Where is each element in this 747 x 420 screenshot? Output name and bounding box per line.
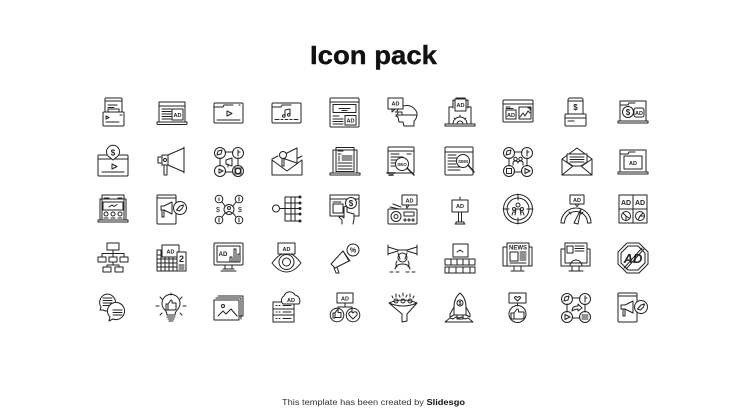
icon: organisation chart <box>98 243 128 272</box>
icon: calendar ad: AD <box>167 250 174 256</box>
icon: video player <box>214 103 243 123</box>
icon: light bulb with thumb <box>156 293 186 321</box>
icon: megaphone <box>158 147 184 175</box>
icon: social media network with megaphone <box>214 148 244 176</box>
icon: social network with people <box>504 148 532 176</box>
icon: ad with thumb and heart: AD <box>341 296 349 302</box>
icon: seo browser with magnifier <box>387 147 414 175</box>
icon: browser with hand and dollar <box>330 195 359 224</box>
icon: laptop with article <box>330 148 360 175</box>
icon: phone with megaphone and twitter <box>157 195 186 224</box>
icon: server with ad cloud <box>273 292 300 322</box>
icon: laptop with ad <box>157 102 187 124</box>
icon: laptop with dollar and ad: $ <box>626 108 631 117</box>
icon: branching node tree <box>272 196 302 222</box>
icon: browser with ad and chart: AD <box>507 113 515 119</box>
icon: monitor with ad chart <box>214 243 243 271</box>
icon: sem browser with magnifier <box>445 147 474 175</box>
icon: money network people: $ <box>216 207 220 214</box>
icon: no ads octagon: AD <box>623 251 643 266</box>
icon: calendar ad <box>157 245 186 271</box>
title: Icon pack <box>310 40 438 70</box>
icon: radio with ad <box>388 195 417 224</box>
icon: eye with ad: AD <box>283 247 290 253</box>
icon: phone and ad card <box>103 98 124 126</box>
icon: four ad panels: AD <box>621 200 631 207</box>
icon: laptop dashboard <box>98 195 128 222</box>
icon: calendar ad: 2 <box>179 254 184 264</box>
icon: laptop with ad screen: AD <box>629 161 637 167</box>
icon: head with ad bubble: AD <box>392 102 399 108</box>
icon: phone with dollar and card: $ <box>573 103 578 112</box>
icon: gauge with ad: AD <box>573 198 581 204</box>
icon: browser with ad: AD <box>347 118 354 124</box>
icon: browser with hand and dollar: $ <box>349 199 354 208</box>
icon: megaphone with percent <box>331 244 359 273</box>
icon: open envelope <box>562 148 592 175</box>
icon: heart and thumb badge <box>509 293 526 322</box>
icon: keyboard with monitor <box>445 244 475 273</box>
icon: funnel with dollars <box>389 293 417 322</box>
icon: image stack <box>214 296 243 320</box>
icon: ad with thumb and heart <box>330 293 360 322</box>
icon: laptop with ad: AD <box>174 113 181 119</box>
icon grid <box>98 98 648 322</box>
icon: money network people <box>215 195 243 224</box>
icon: target with people <box>503 194 533 224</box>
icon: monitor with ad chart: AD <box>219 252 228 258</box>
icon: phone with megaphone and twitter bubble <box>618 293 648 322</box>
icon: person with two megaphones <box>388 245 417 272</box>
icon: laptop with dollar and ad: AD <box>635 111 643 117</box>
icon: envelope with megaphone <box>272 148 302 175</box>
icon: four ad panels <box>619 195 647 223</box>
icon: monitor with document and gear <box>561 243 590 271</box>
icon: ad signpost <box>452 197 468 224</box>
icon: music player <box>272 103 301 123</box>
icon: rocket with dollar <box>445 293 473 322</box>
icon: monitor with news <box>503 243 532 271</box>
icon: rocket with dollar: $ <box>459 301 462 307</box>
icon: laptop with dollar and ad <box>618 101 648 123</box>
icon: server with ad cloud: AD <box>287 298 295 304</box>
icon: laptop with ad cards and gear <box>445 98 475 126</box>
icon: ad signpost: AD <box>456 204 464 210</box>
icon: video with dollar badge <box>98 145 128 176</box>
icon: head with ad bubble <box>388 98 417 126</box>
footer credit: This template has been created by Slidesgo <box>282 398 465 407</box>
icon: laptop with ad cards and gear: AD <box>457 103 464 109</box>
icon: monitor with news: NEWS <box>509 246 527 252</box>
icon: four ad panels: AD <box>635 200 645 207</box>
icon: social network share <box>562 294 590 322</box>
icon: browser with ad and chart <box>503 100 533 122</box>
icon: seo browser with magnifier: SEO <box>397 162 407 167</box>
icon: chat bubbles <box>100 294 125 321</box>
icon: browser with ad <box>330 98 359 127</box>
icon: no ads octagon <box>618 243 648 273</box>
icon: laptop with ad screen <box>618 150 648 174</box>
icon: sem browser with magnifier: SEM <box>458 159 468 164</box>
icon: money network people: $ <box>238 207 242 214</box>
icon: video with dollar badge: $ <box>111 148 116 158</box>
icon: eye with ad <box>272 243 301 272</box>
icon: gauge with ad <box>561 195 591 224</box>
icon: radio with ad: AD <box>406 198 413 204</box>
icon: megaphone with percent: % <box>350 248 357 254</box>
icon: phone with dollar and card <box>565 98 586 126</box>
